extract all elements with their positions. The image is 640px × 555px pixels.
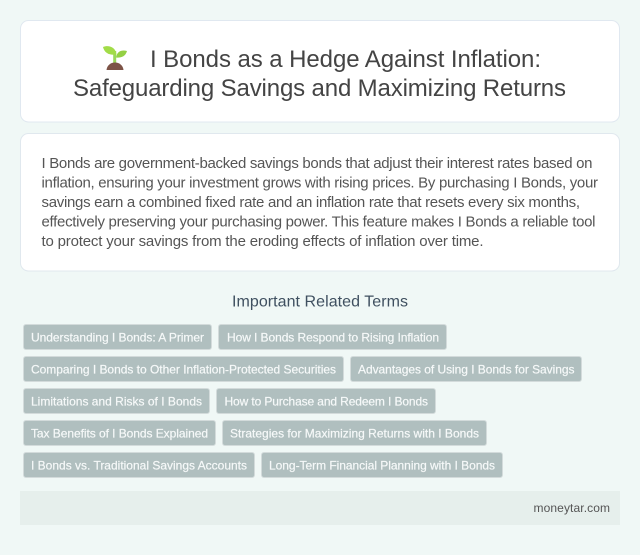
- tag: advantages: Advantages of Using I Bonds for Savings: [358, 362, 574, 376]
- tag: long-term: Long-Term Financial Planning with I Bonds: [269, 458, 495, 472]
- footer: [20, 491, 620, 525]
- body text: savings earn a combined fixed rate and an inflation rate that resets every six months,: [42, 194, 580, 211]
- tag: rising inflation: [218, 324, 446, 350]
- tag: limitations: [24, 388, 210, 414]
- title text: I Bonds as a Hedge Against Inflation:: [150, 46, 541, 73]
- tag: primer: [24, 324, 212, 350]
- title text: Safeguarding Savings and Maximizing Returns: [73, 75, 566, 102]
- tag: strategies: [222, 420, 486, 446]
- panel: title card: [20, 20, 620, 122]
- title text: [73, 46, 566, 102]
- tag: primer: Understanding I Bonds: A Primer: [31, 330, 204, 344]
- body text: [42, 155, 598, 250]
- tag: comparing: [24, 356, 344, 382]
- tag: vs savings: [24, 452, 254, 478]
- tag: vs savings: I Bonds vs. Traditional Savings Accounts: [31, 458, 247, 472]
- body text: inflation, ensuring your investment grows with rising prices. By purchasing I Bonds, your: [42, 174, 598, 192]
- footer source: moneytar.com: [534, 501, 610, 515]
- tag: long-term: [262, 452, 502, 478]
- body text: effectively preserving your purchasing power. This feature makes I Bonds a reliable tool: [42, 214, 596, 230]
- tag: advantages: [350, 356, 582, 382]
- tag: tax benefits: [24, 420, 216, 446]
- icon: sprout: [103, 46, 127, 70]
- tag: limitations: Limitations and Risks of I Bonds: [31, 394, 202, 408]
- body text: I Bonds are government-backed savings bonds that adjust their interest rates based on: [42, 155, 592, 172]
- tag: comparing: Comparing I Bonds to Other Inflation-Protected Securities: [31, 362, 336, 376]
- tag: tax benefits: Tax Benefits of I Bonds Explained: [31, 426, 208, 440]
- heading: related terms: Important Related Terms: [232, 294, 408, 310]
- panel: description: [20, 134, 620, 271]
- tag list: [24, 324, 582, 478]
- body text: to protect your savings from the eroding effects of inflation over time.: [42, 233, 484, 250]
- tag: strategies: Strategies for Maximizing Returns with I Bonds: [230, 426, 479, 440]
- tag: purchase: How to Purchase and Redeem I Bonds: [224, 394, 428, 408]
- tag: rising inflation: How I Bonds Respond to Rising Inflation: [227, 330, 439, 344]
- tag: purchase: [216, 388, 436, 414]
